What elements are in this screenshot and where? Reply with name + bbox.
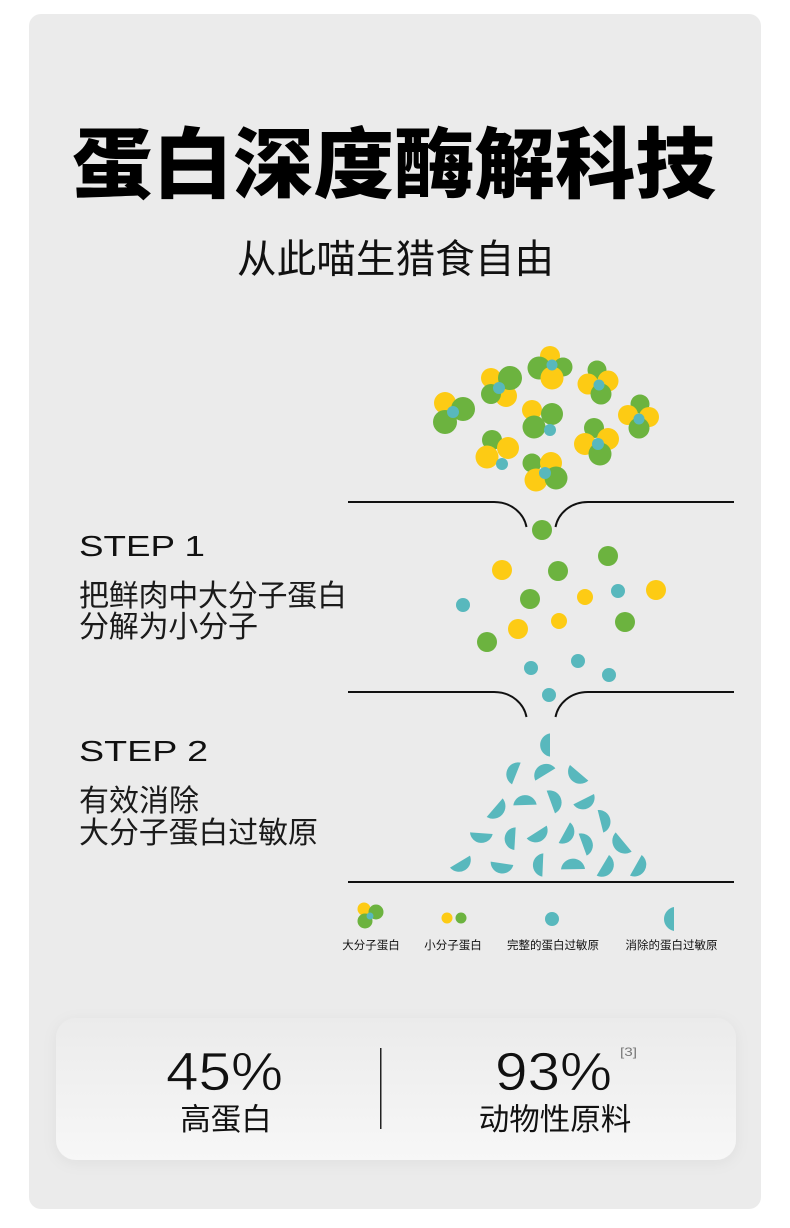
- legend item: intact allergen: 完整的蛋白过敏原: [507, 938, 599, 952]
- stat: 45%: [166, 1042, 283, 1137]
- subtitle: 从此喵生猎食自由: [237, 238, 554, 282]
- legend item: large protein: [342, 902, 400, 952]
- stat: 45%: 45%: [166, 1042, 283, 1102]
- legend item: large protein: 大分子蛋白: [342, 938, 400, 952]
- legend item: eliminated allergen: 消除的蛋白过敏原: [626, 938, 718, 952]
- funnel: filter line 1: [348, 502, 734, 527]
- diagram: pile of eliminated allergen half circles: [450, 733, 646, 877]
- diagram: small molecules after step 1: [456, 520, 666, 702]
- legend item: small protein: 小分子蛋白: [424, 938, 482, 952]
- step 1 heading: STEP 1: [79, 531, 205, 563]
- stat: 93%: [3]: [620, 1045, 637, 1059]
- stat: 93%: 93%: [495, 1042, 612, 1102]
- step 1 description: 分解为小分子: [79, 611, 258, 644]
- stat: 93%: [479, 1042, 637, 1137]
- step 2 description: 大分子蛋白过敏原: [79, 817, 318, 850]
- funnel: filter line 2: [348, 692, 734, 717]
- diagram: large protein clusters: [433, 346, 659, 492]
- stat: 93%: 动物性原料: [479, 1103, 631, 1137]
- step 2 description: 有效消除: [79, 785, 199, 818]
- title: 蛋白深度酶解科技: [72, 123, 716, 209]
- legend item: small protein: [424, 912, 482, 952]
- divider: [380, 1048, 382, 1129]
- stats card: [56, 1018, 736, 1160]
- legend: [342, 902, 718, 952]
- step 1 description: 把鲜肉中大分子蛋白: [79, 580, 347, 613]
- step 2 heading: STEP 2: [79, 736, 208, 768]
- baseline: [348, 881, 734, 883]
- legend item: eliminated allergen: [626, 907, 718, 952]
- stat: 45%: 高蛋白: [180, 1103, 272, 1137]
- legend item: intact allergen: [507, 912, 599, 952]
- step 1 description: [79, 580, 347, 644]
- step 2 description: [79, 785, 318, 850]
